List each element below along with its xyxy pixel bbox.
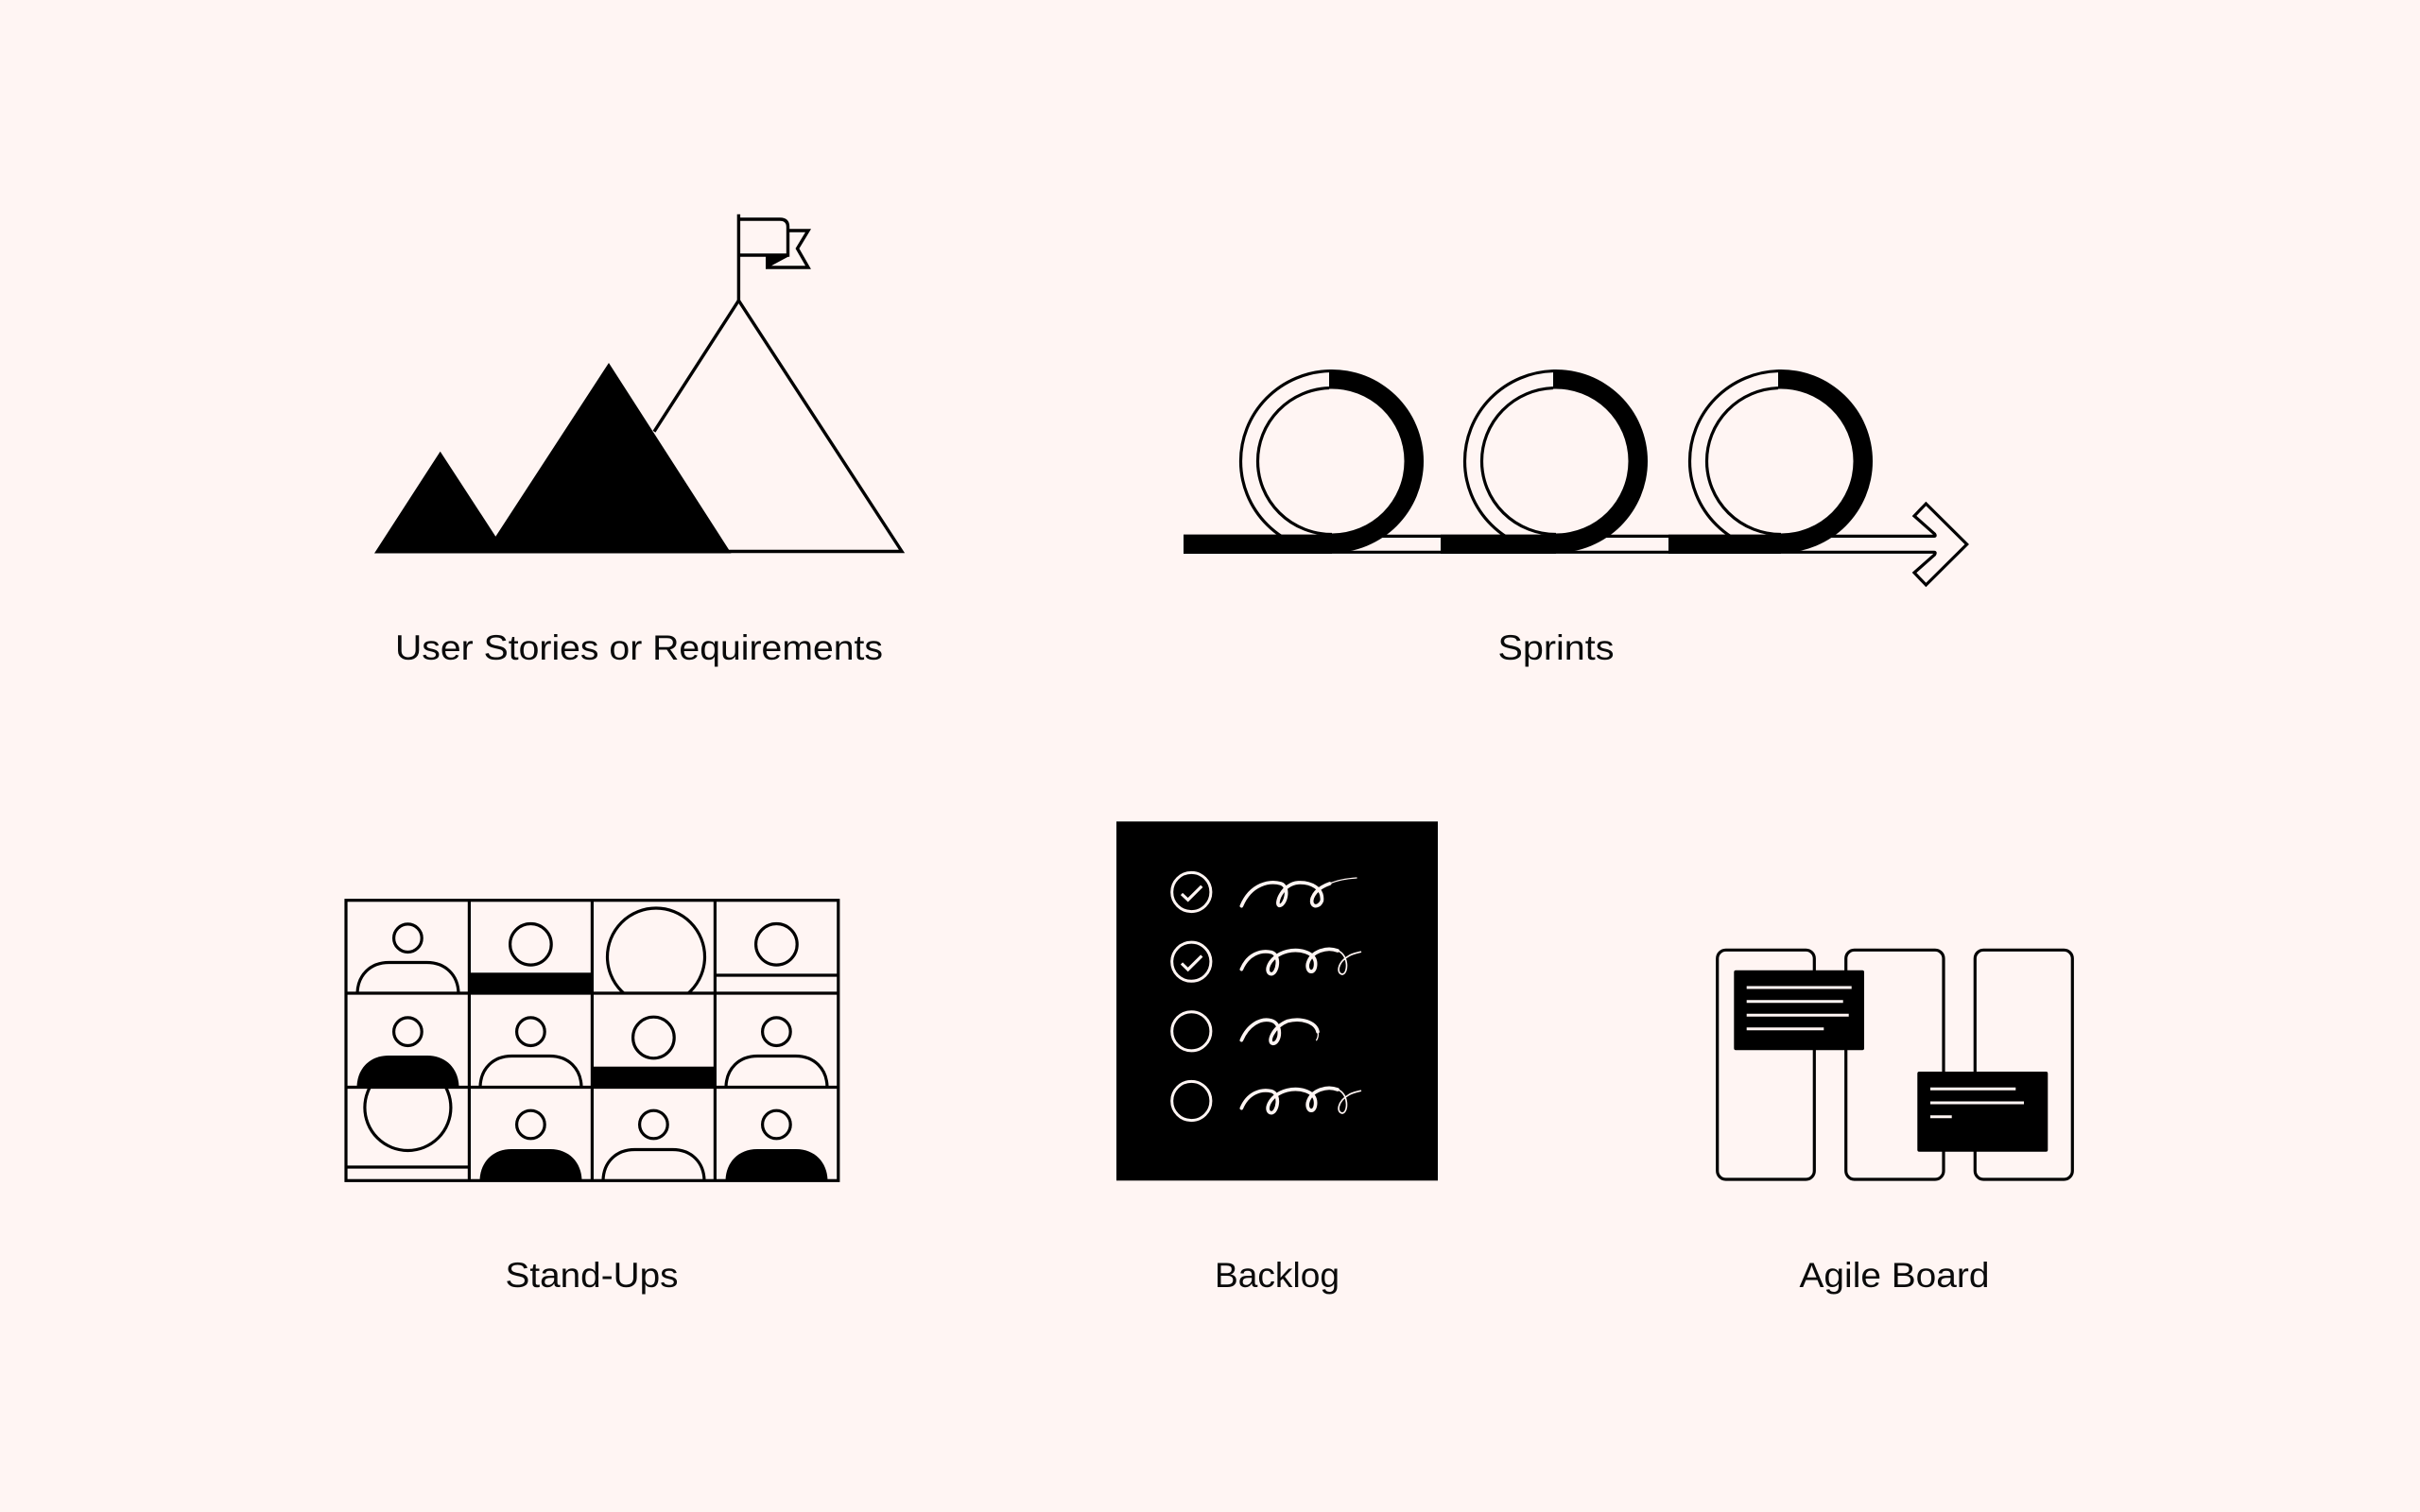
panel: user stories or requirements: [374, 215, 902, 667]
label: sprints: Sprints: [1497, 628, 1615, 667]
black foreground mountains: [374, 363, 732, 554]
checkboxes: [1172, 872, 1211, 1121]
icon: black checklist card: [1116, 821, 1438, 1180]
scribbled task lines: [1241, 878, 1360, 1113]
card background: [1116, 821, 1438, 1180]
participants: [346, 908, 838, 1180]
card two: [1917, 1072, 2048, 1152]
label: agile board: Agile Board: [1800, 1256, 1989, 1295]
board columns: [1718, 950, 2072, 1179]
outlined tall mountain: [654, 301, 902, 552]
panel: stand-ups: [346, 901, 838, 1295]
icon: board with columns and cards: [1718, 950, 2072, 1179]
panel: backlog: [1116, 821, 1438, 1295]
card one: [1734, 971, 1864, 1050]
loop three: [1690, 369, 1873, 553]
grid frame: [346, 901, 838, 1180]
icon: video call grid: [346, 901, 838, 1180]
label: user stories: User Stories or Requirements: [395, 628, 883, 667]
arrow outline: [1184, 504, 1967, 585]
flag: [738, 215, 808, 301]
loop one: [1240, 369, 1424, 553]
black bar segments: [1184, 535, 1781, 554]
icon: mountains with flag: [374, 215, 902, 553]
panel: agile board: [1718, 950, 2072, 1295]
label: backlog: Backlog: [1215, 1256, 1340, 1295]
panel: sprints: [1184, 369, 1967, 667]
loop two: [1465, 369, 1648, 553]
icon: sprint loops with arrow: [1184, 369, 1967, 585]
label: stand-ups: Stand-Ups: [505, 1256, 679, 1295]
